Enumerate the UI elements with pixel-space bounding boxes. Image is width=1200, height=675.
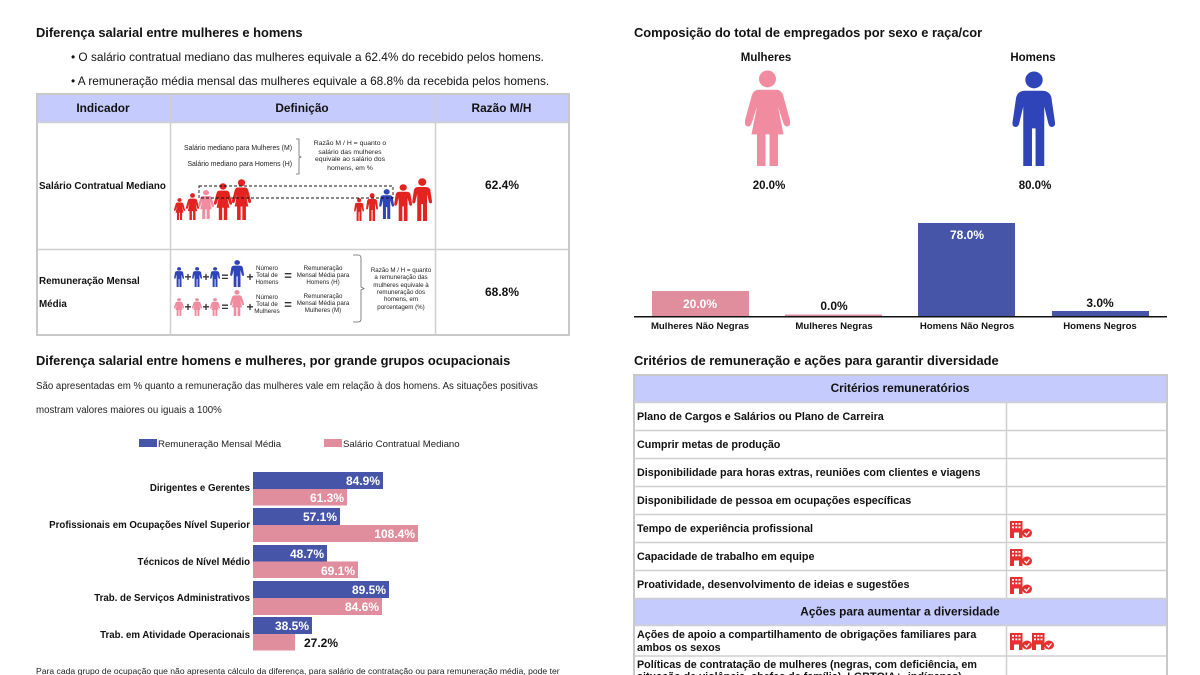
action rows: ambos os sexos xyxy=(637,642,721,654)
text block: key findings bullets xyxy=(71,50,549,88)
row label: salário contratual mediano: Salário Contratual Mediano xyxy=(39,181,166,192)
diagram: mean pay formula: Total de xyxy=(256,272,278,279)
value: 68.8%: 68.8% xyxy=(485,285,519,299)
row label: remuneração mensal média xyxy=(39,276,140,310)
icon: company check xyxy=(1010,549,1032,566)
panel: pictogram men xyxy=(1010,52,1056,192)
icon: company check xyxy=(1010,521,1032,538)
heading: diferença salarial por grupos ocupacionais: Diferença salarial entre homens e mulheres, por grande grupos ocupacionais xyxy=(36,353,510,368)
icon: company check xyxy=(1010,577,1032,594)
diagram: mean pay formula: Remuneração xyxy=(304,265,343,272)
diagram: mean pay formula: + xyxy=(184,270,192,284)
section header: critérios remuneratórios: Critérios remuneratórios xyxy=(831,381,970,395)
diagram: median salary families: salário das mulheres xyxy=(318,149,382,156)
legend: Salário Contratual Mediano xyxy=(343,439,460,450)
diagram: mean pay formula: remuneração dos xyxy=(377,289,425,296)
legend xyxy=(139,439,460,450)
diagram: mean pay formula: Mulheres (M) xyxy=(305,307,341,314)
criteria rows: Tempo de experiência profissional xyxy=(637,523,813,535)
panel: criteria table xyxy=(634,375,1167,675)
diagram: mean pay formula: a remuneração das xyxy=(374,274,428,281)
text block: chart description: São apresentadas em % quanto a remuneração das mulheres vale em relação à dos homens. As situações positivas xyxy=(36,381,538,392)
bar chart: occupational groups: 27.2% xyxy=(304,636,338,650)
bar chart: occupational groups: 89.5% xyxy=(352,583,386,597)
bar chart: composition by sex and race: Mulheres Negras xyxy=(795,321,873,332)
diagram: mean pay formula: Razão M / H = quanto xyxy=(371,267,432,274)
diagram: median salary families: equivale ao salário dos xyxy=(315,156,386,163)
bar chart: composition by sex and race: 78.0% xyxy=(950,228,984,242)
panel: pictogram men: 80.0% xyxy=(1019,180,1051,192)
bar chart: occupational groups xyxy=(49,472,418,650)
section header: ações para aumentar a diversidade: Ações para aumentar a diversidade xyxy=(800,604,1000,618)
diagram: mean pay formula xyxy=(174,255,432,322)
diagram: mean pay formula: = xyxy=(221,270,229,284)
diagram: mean pay formula: Número xyxy=(256,294,279,301)
bar chart: composition by sex and race: Mulheres Não Negras xyxy=(651,321,749,332)
diagram: mean pay formula: porcentagem (%) xyxy=(377,304,425,311)
bar chart: occupational groups: Trab. em Atividade Operacionais xyxy=(100,630,250,641)
diagram: mean pay formula: mulheres equivale à xyxy=(373,282,429,289)
diagram: mean pay formula: = xyxy=(221,300,229,314)
panel: indicator definition table xyxy=(37,94,569,335)
heading: diferença salarial entre mulheres e homens: Diferença salarial entre mulheres e homens xyxy=(36,25,303,40)
diagram: mean pay formula: = xyxy=(284,268,292,283)
criteria rows: Disponibilidade para horas extras, reuniões com clientes e viagens xyxy=(637,467,981,479)
diagram: mean pay formula: Número xyxy=(256,265,279,272)
panel: pictogram men: Homens xyxy=(1010,52,1056,64)
diagram: mean pay formula: Mensal Média para xyxy=(297,300,350,307)
text block: key findings bullets: • O salário contratual mediano das mulheres equivale a 62.4% do recebido pelos homens. xyxy=(71,50,544,64)
icon: company check pair xyxy=(1010,633,1054,650)
bar chart: occupational groups: 69.1% xyxy=(321,564,355,578)
bar chart: occupational groups: 57.1% xyxy=(303,510,337,524)
diagram: mean pay formula: Mulheres xyxy=(254,308,280,315)
diagram: mean pay formula: + xyxy=(246,270,254,284)
criteria rows: Proatividade, desenvolvimento de ideias e sugestões xyxy=(637,579,909,591)
bar chart: composition by sex and race: 20.0% xyxy=(683,297,717,311)
diagram: mean pay formula: + xyxy=(202,300,210,314)
bar chart: occupational groups: 84.9% xyxy=(346,474,380,488)
diagram: mean pay formula: Remuneração xyxy=(304,293,343,300)
bar chart: occupational groups: 61.3% xyxy=(310,491,344,505)
diagram: median salary families: Razão M / H = quanto o xyxy=(314,140,386,147)
diagram: median salary families: Salário mediano para Homens (H) xyxy=(187,161,292,168)
text block: chart description xyxy=(36,381,538,416)
text block: key findings bullets: • A remuneração média mensal das mulheres equivale a 68.8% da recebida pelos homens. xyxy=(71,74,549,88)
diagram: mean pay formula: Mensal Média para xyxy=(297,272,350,279)
action rows: Políticas de contratação de mulheres (negras, com deficiência, em xyxy=(637,659,977,671)
criteria rows xyxy=(637,411,981,591)
diagram: median salary families: Salário mediano para Mulheres (M) xyxy=(184,145,292,152)
bar chart: occupational groups: Profissionais em Ocupações Nível Superior xyxy=(49,520,250,531)
diagram: mean pay formula: Homens (H) xyxy=(306,279,340,286)
text block: chart description: mostram valores maiores ou iguais a 100% xyxy=(36,405,222,416)
diagram: mean pay formula: + xyxy=(202,270,210,284)
bar chart: composition by sex and race: Homens Não Negros xyxy=(920,321,1014,332)
bar chart: occupational groups: Dirigentes e Gerentes xyxy=(150,483,250,494)
diagram: mean pay formula: = xyxy=(284,297,292,312)
panel: pictogram women: Mulheres xyxy=(741,52,791,64)
criteria rows: Cumprir metas de produção xyxy=(637,439,781,451)
bar chart: occupational groups: 48.7% xyxy=(290,547,324,561)
action rows xyxy=(637,629,977,675)
criteria rows: Capacidade de trabalho em equipe xyxy=(637,551,814,563)
bar chart: composition by sex and race: 3.0% xyxy=(1086,296,1114,310)
panel: pictogram women xyxy=(741,52,791,192)
bar chart: occupational groups: Trab. de Serviços Administrativos xyxy=(94,593,250,604)
row label: remuneração mensal média: Média xyxy=(39,299,67,310)
diagram: median salary families: homens, em % xyxy=(327,165,373,172)
bar chart: occupational groups: 108.4% xyxy=(374,527,415,541)
table header row: Razão M/H xyxy=(472,101,531,115)
diagram: mean pay formula: Total de xyxy=(256,301,278,308)
bar chart: occupational groups: 38.5% xyxy=(275,619,309,633)
action rows: Ações de apoio a compartilhamento de obrigações familiares para xyxy=(637,629,977,641)
table header row: Definição xyxy=(275,101,329,115)
bar chart: composition by sex and race: Homens Negros xyxy=(1063,321,1137,332)
panel: pictogram women: 20.0% xyxy=(753,180,785,192)
diagram: mean pay formula: homens, em xyxy=(384,296,418,303)
bar chart: occupational groups: Técnicos de Nível Médio xyxy=(137,557,250,568)
table header row xyxy=(76,101,531,115)
diagram: mean pay formula: + xyxy=(246,300,254,314)
row label: remuneração mensal média: Remuneração Mensal xyxy=(39,276,140,287)
diagram: median salary families xyxy=(174,139,432,221)
diagram: mean pay formula: Homens xyxy=(255,279,279,286)
value: 62.4%: 62.4% xyxy=(485,178,519,192)
heading: critérios de remuneração: Critérios de remuneração e ações para garantir diversidade xyxy=(634,353,999,368)
bar chart: occupational groups: 84.6% xyxy=(345,600,379,614)
bar chart: composition by sex and race xyxy=(634,223,1167,332)
heading: composição do total de empregados: Composição do total de empregados por sexo e raça/cor xyxy=(634,25,982,40)
diagram: mean pay formula: + xyxy=(184,300,192,314)
criteria rows: Disponibilidade de pessoa em ocupações específicas xyxy=(637,495,911,507)
table header row: Indicador xyxy=(76,101,130,115)
legend: Remuneração Mensal Média xyxy=(158,439,282,450)
bar chart: composition by sex and race: 0.0% xyxy=(820,299,848,313)
criteria rows: Plano de Cargos e Salários ou Plano de Carreira xyxy=(637,411,885,423)
